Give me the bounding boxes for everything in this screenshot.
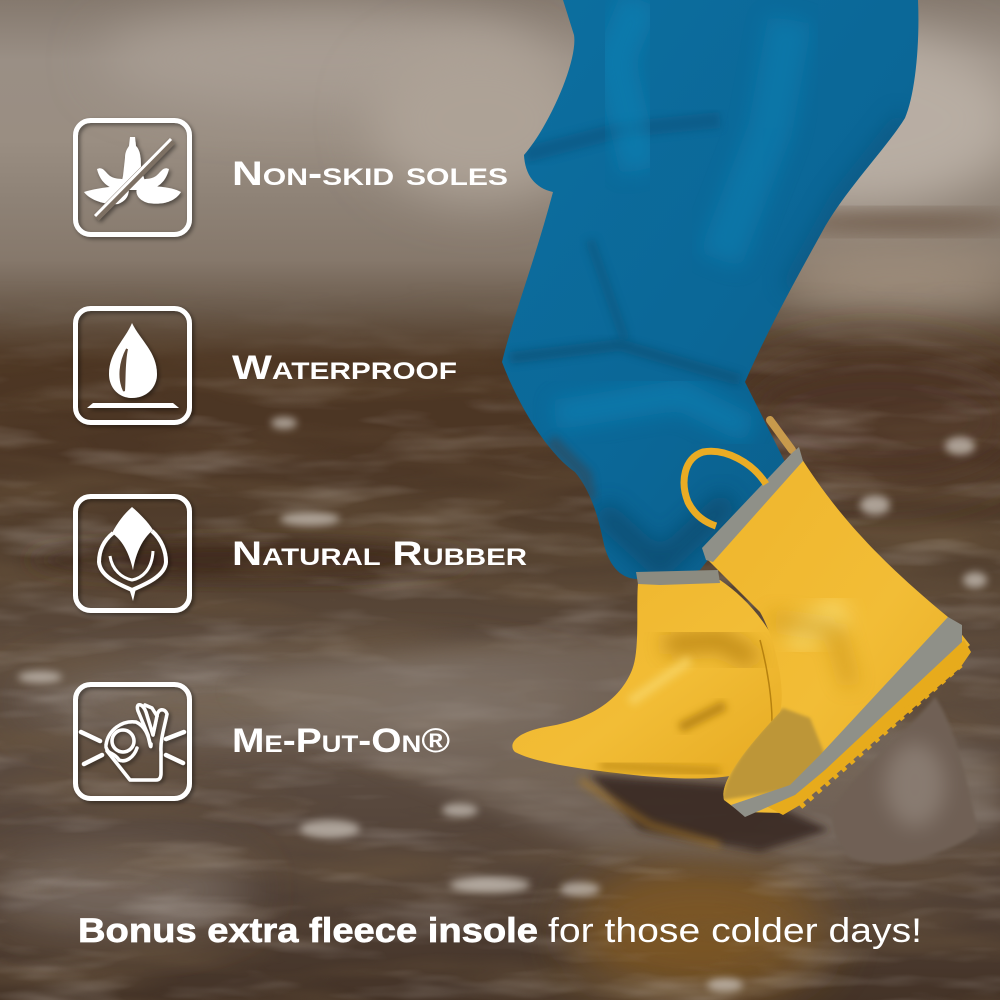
left yellow boot bbox=[512, 570, 790, 779]
icon: slippery banana crossed out bbox=[76, 120, 190, 234]
grey reflective strip bbox=[731, 617, 962, 817]
footer tagline: Bonus extra fleece insole bbox=[78, 912, 538, 950]
icon: rubber tree leaf bud bbox=[76, 496, 190, 610]
label: me-put-on: Me-Put-On® bbox=[232, 722, 450, 760]
left boot seam bbox=[760, 640, 772, 722]
label: waterproof: Waterproof bbox=[232, 349, 457, 387]
footer tagline bbox=[78, 912, 922, 950]
slash bbox=[96, 141, 172, 218]
icon: water drop on surface bbox=[76, 308, 190, 422]
feature: natural rubber bbox=[76, 496, 527, 610]
dark puddle shadow bbox=[590, 775, 830, 852]
boot pull tab bbox=[770, 420, 792, 450]
boot handle loop bbox=[684, 451, 766, 526]
right yellow boot bbox=[684, 420, 971, 817]
rippled water around boots bbox=[230, 640, 1000, 860]
label: non-skid soles: Non-skid soles bbox=[232, 155, 508, 193]
splash behind right boot bbox=[832, 697, 978, 863]
grey boot collar bbox=[702, 447, 803, 562]
footer tagline: for those colder days! bbox=[548, 912, 922, 950]
feature: me-put-on bbox=[76, 684, 450, 798]
icon: okay hand gesture bbox=[76, 684, 190, 798]
feature: waterproof bbox=[76, 308, 457, 422]
label: natural rubber: Natural Rubber bbox=[232, 535, 527, 573]
pants: blue rain suit bbox=[502, 0, 918, 579]
yellow sole with tread bbox=[766, 640, 971, 815]
feature: non-skid soles bbox=[76, 120, 508, 234]
